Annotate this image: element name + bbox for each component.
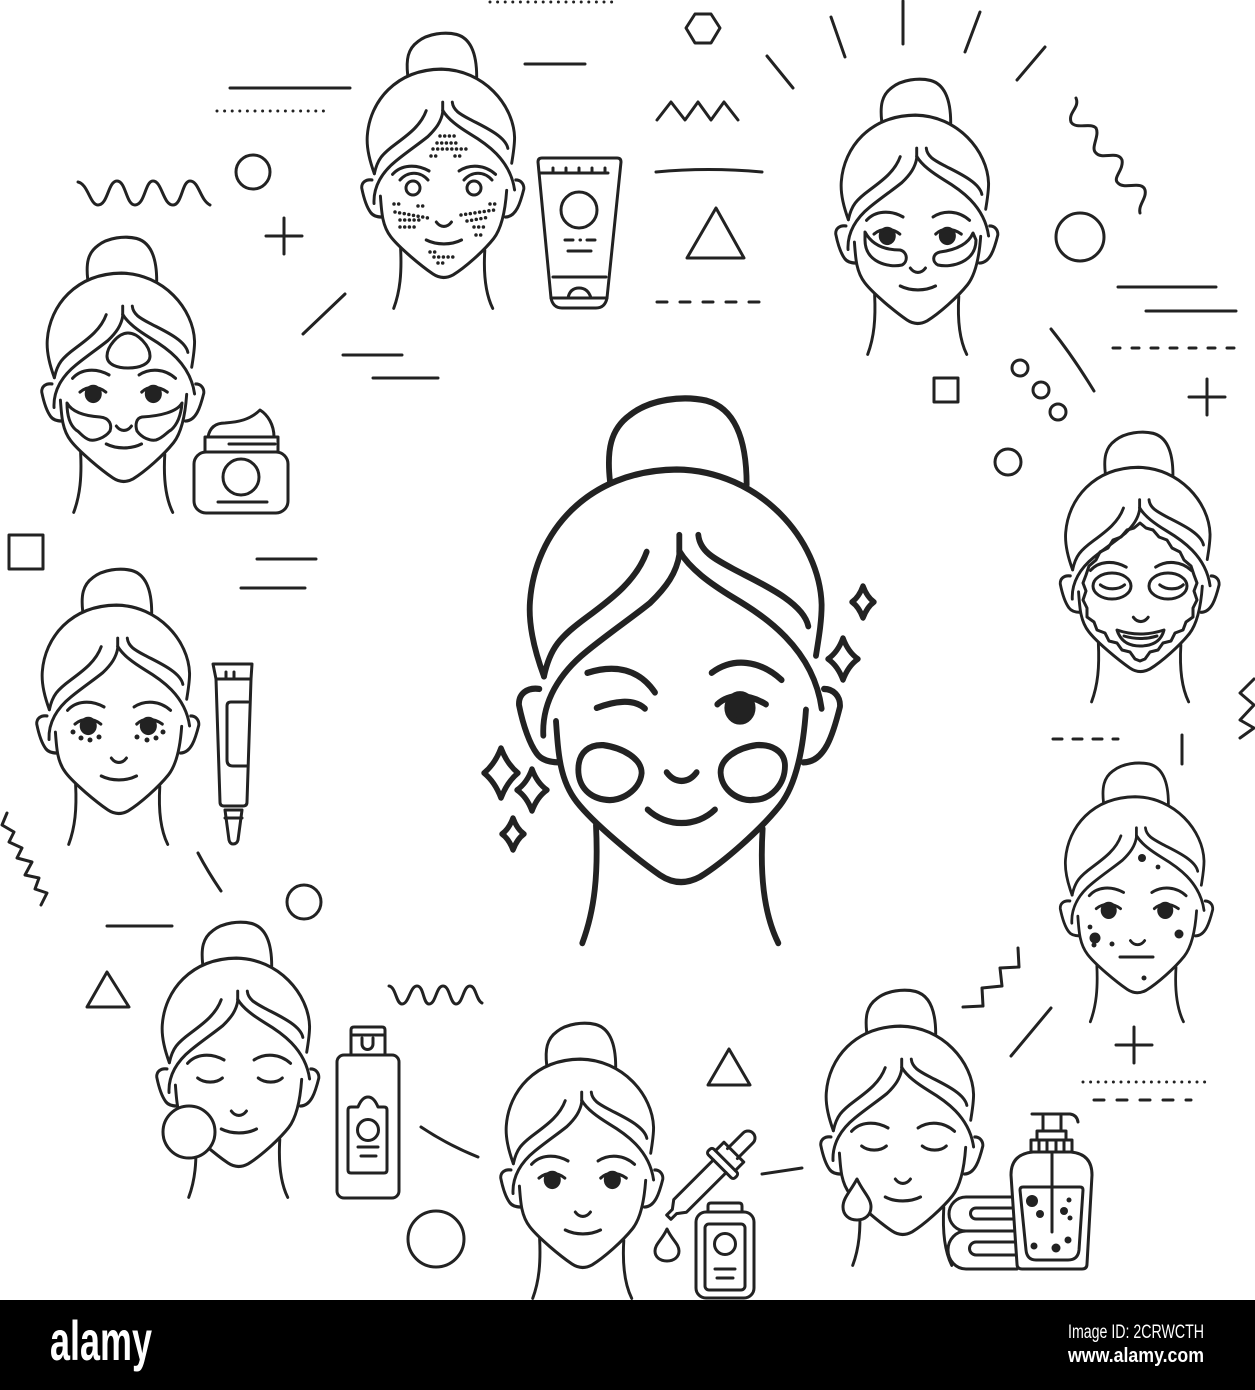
bottom black bar <box>0 1300 1255 1390</box>
squiggle <box>1071 98 1145 213</box>
face with pores <box>362 33 524 308</box>
tube of cream <box>538 158 621 308</box>
winking face features <box>578 663 785 823</box>
sheet mask <box>1083 523 1197 661</box>
central face with glowing cheeks <box>484 398 874 943</box>
step: cleansing sponge and toner <box>157 922 399 1198</box>
hexagon <box>686 14 720 43</box>
image id: Image ID: 2CRWCTH <box>1068 1322 1204 1343</box>
wave top left <box>78 181 210 205</box>
under-eye dots <box>70 730 166 742</box>
step: facial patches with cream jar <box>42 237 288 513</box>
circle and connector lower centre <box>408 1127 478 1267</box>
step: serum with dropper <box>501 1023 766 1298</box>
water drop <box>843 1179 871 1220</box>
step: face with enlarged pores and cleansing tube <box>362 33 621 308</box>
cream jar <box>194 410 288 513</box>
circle and plus top left <box>236 155 302 254</box>
serum bottle <box>696 1203 754 1298</box>
flat mouth <box>1120 956 1153 958</box>
top dotted and dash lines <box>217 2 618 111</box>
plus and dotted lines lower right <box>762 1027 1206 1174</box>
folded towels <box>948 1197 1017 1269</box>
head outline <box>519 398 840 943</box>
sponge <box>163 1106 215 1158</box>
triangle above dropper <box>708 1049 750 1085</box>
acne spots <box>1088 854 1184 980</box>
step: under-eye patches face <box>836 79 998 354</box>
website: www.alamy.com <box>1067 1345 1204 1367</box>
left side square and lines <box>9 535 316 588</box>
right-side zigzag and dashes <box>1053 679 1254 764</box>
step: under-eye dark spots with cream applicator <box>37 569 252 844</box>
soap pump bottle <box>1011 1114 1092 1269</box>
arc line, triangle and dash line <box>656 170 762 302</box>
wave lower centre <box>389 986 482 1004</box>
lower left shapes <box>87 853 321 1007</box>
eye patches <box>865 232 976 266</box>
radiating rays <box>767 1 1045 88</box>
right circles and lines <box>934 213 1240 475</box>
serum drop <box>655 1229 679 1261</box>
forehead and cheek patches <box>67 333 182 440</box>
step: washing face with soap and towels <box>821 990 1092 1269</box>
step: face with acne spots <box>1060 763 1213 1022</box>
left zigzag <box>2 813 47 905</box>
zigzag <box>657 102 738 120</box>
dropper <box>655 1120 766 1231</box>
diagonal and dashes upper left <box>303 294 438 378</box>
toner bottle <box>337 1027 399 1198</box>
eye cream tube <box>213 664 252 844</box>
stairs and diagonal <box>963 948 1051 1056</box>
alamy logo: alamy <box>50 1309 152 1372</box>
sparkles <box>484 586 874 850</box>
step: peel-off sheet mask face <box>1060 432 1219 702</box>
